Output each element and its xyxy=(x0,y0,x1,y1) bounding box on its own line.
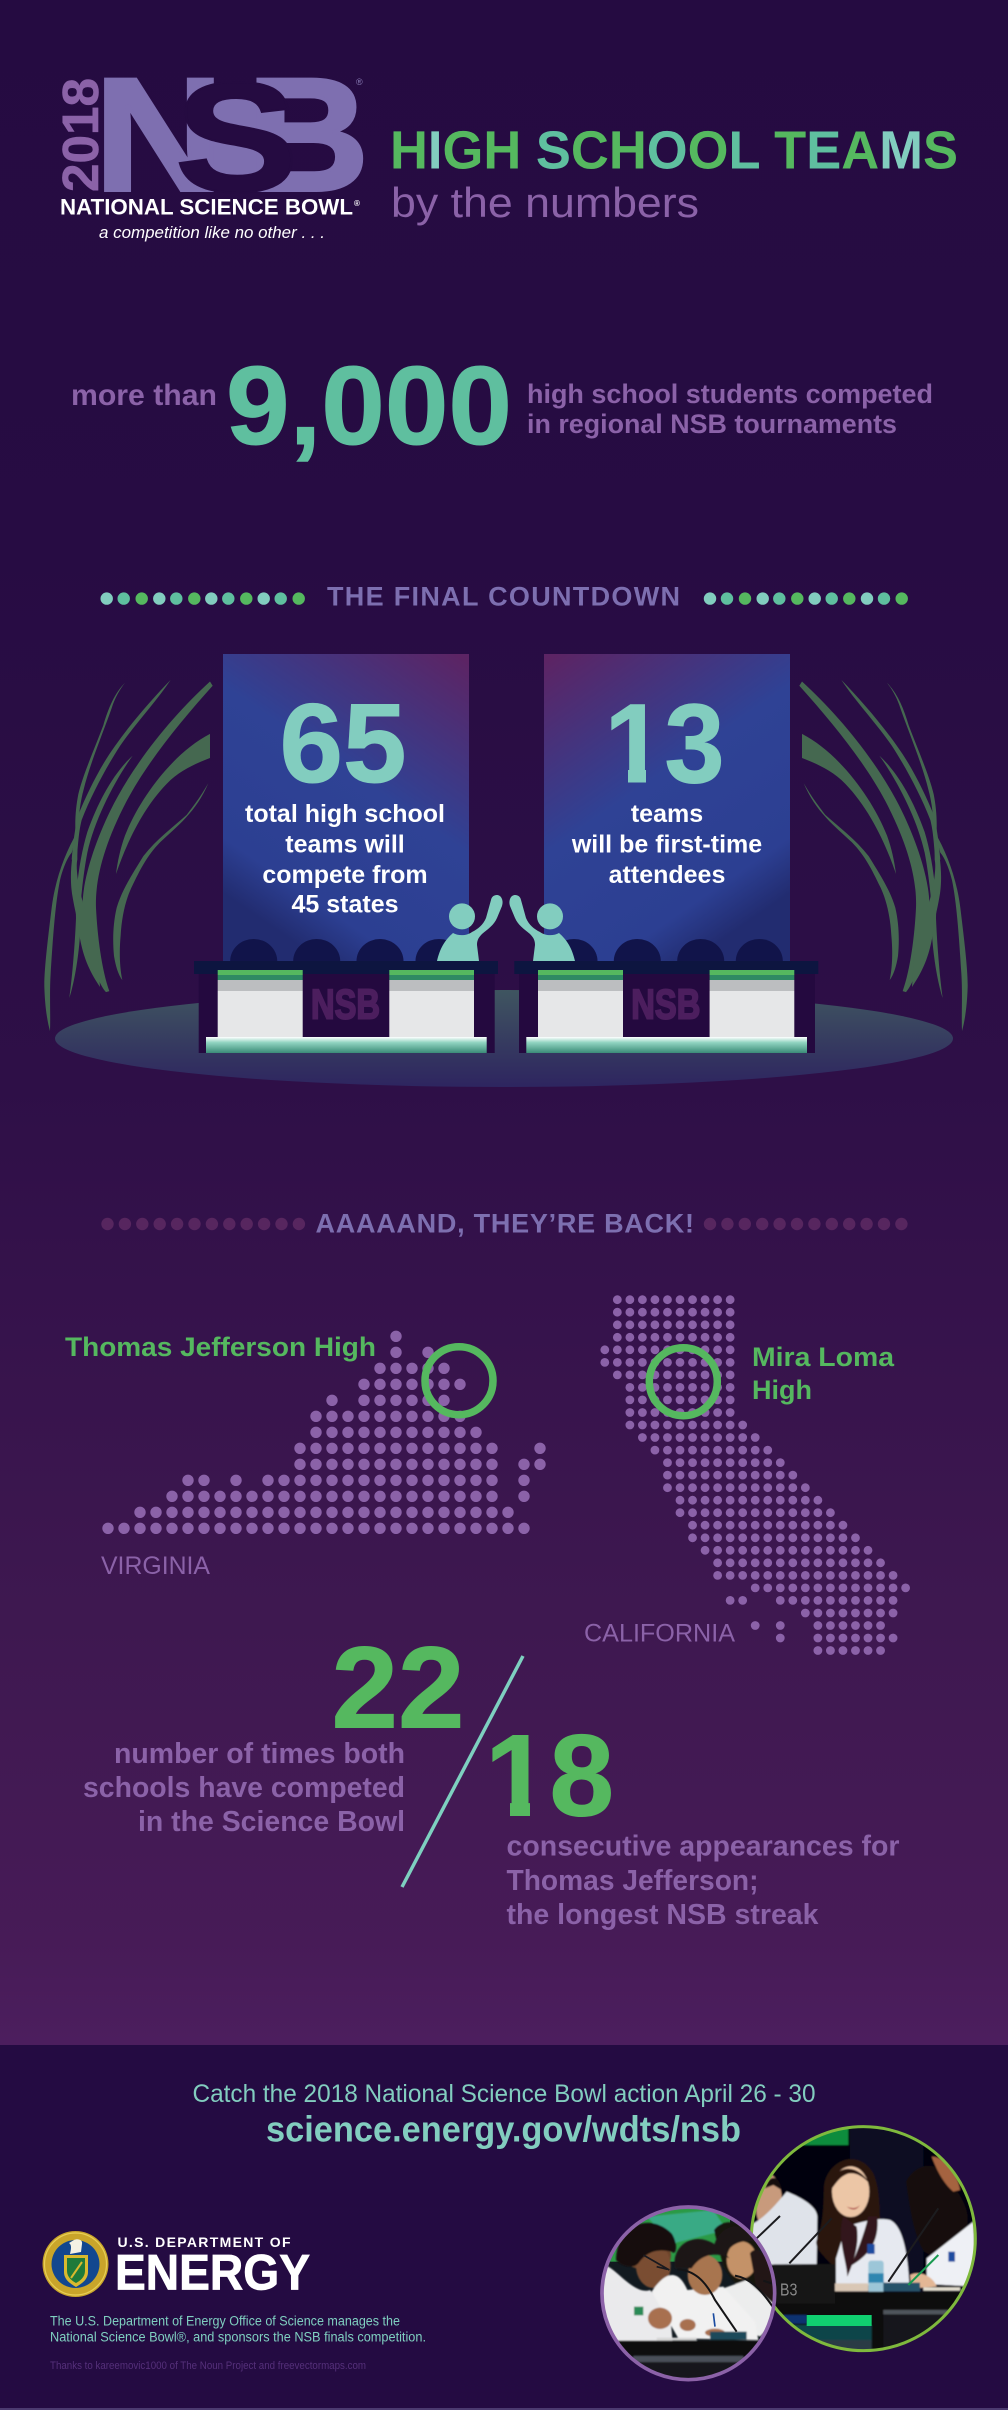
number: 65: 65 xyxy=(280,681,406,806)
text: Energy: ENERGY xyxy=(115,2244,310,2300)
icon: DOE seal xyxy=(42,2231,108,2297)
label: Virginia: VIRGINIA xyxy=(101,1552,210,1580)
panel: footer xyxy=(42,2084,977,2382)
logo mark NSB: S xyxy=(175,51,299,225)
text: DOE statement: National Science Bowl®, and sponsors the NSB finals competition. xyxy=(50,2330,426,2344)
panel: 65 teams screen xyxy=(223,654,469,961)
map: California xyxy=(584,1300,906,1650)
stage floor xyxy=(55,990,953,1087)
icon: contestant left xyxy=(437,895,503,961)
dots right xyxy=(704,592,908,605)
label: Thomas Jefferson High: Thomas Jefferson High xyxy=(65,1332,376,1362)
icon: plants right xyxy=(799,680,968,1031)
text: U.S. Department of: U.S. DEPARTMENT OF xyxy=(118,2234,291,2250)
label: Mira Loma High: High xyxy=(752,1375,812,1405)
photo: girl at the buzzer xyxy=(747,2123,980,2357)
california dot map xyxy=(605,1300,906,1650)
subtitle: by the numbers xyxy=(391,179,699,226)
text: 18 description: Thomas Jefferson; xyxy=(506,1865,758,1897)
icon: seats right xyxy=(550,939,783,961)
dots right xyxy=(704,1218,908,1230)
text: 22 description: number of times both xyxy=(114,1738,405,1770)
stat: 9,000 students xyxy=(71,344,933,468)
text: 18 description: consecutive appearances for xyxy=(506,1830,900,1862)
icon: podium right xyxy=(514,961,818,1053)
text: 22 description: schools have competed xyxy=(83,1772,405,1804)
number: 18: 18 xyxy=(485,1710,614,1840)
logo year: 2018 xyxy=(52,78,109,192)
label: California: CALIFORNIA xyxy=(584,1620,735,1648)
marker ring: Thomas Jefferson xyxy=(425,1347,493,1415)
label: Mira Loma High: Mira Loma xyxy=(752,1342,895,1372)
logo: National Science Bowl xyxy=(52,45,369,242)
logo tagline: a competition like no other . . . xyxy=(99,223,325,242)
number: 9,000: 9,000 xyxy=(226,344,512,468)
logo name: NATIONAL SCIENCE BOWL xyxy=(60,194,353,220)
title: HIGH SCHOOL TEAMS xyxy=(390,120,958,180)
logo mark NSB xyxy=(94,45,369,225)
map: Virginia xyxy=(65,1332,540,1580)
photo: boys at the buzzer xyxy=(600,2205,777,2384)
stat: 22 times competed xyxy=(83,1622,464,1838)
screen background xyxy=(223,654,469,961)
text: credits: Thanks to kareemovic1000 of The Noun Project and freevectormaps.com xyxy=(50,2360,366,2372)
web address: science.energy.gov/wdts/nsb xyxy=(266,2108,741,2150)
text: 22 description: in the Science Bowl xyxy=(138,1806,405,1838)
logo mark NSB: N xyxy=(94,45,224,225)
logo mark NSB: ® xyxy=(356,77,363,87)
number: 13: 13 xyxy=(604,681,724,806)
text: 13 description: attendees xyxy=(609,861,725,889)
dots left xyxy=(101,1218,305,1230)
text: students description: in regional NSB tournaments xyxy=(527,409,897,439)
stat: 18 consecutive appearances xyxy=(492,1734,899,1930)
text: 65 description: teams will xyxy=(285,830,405,858)
icon: podium left: NSB xyxy=(311,980,380,1028)
icon: podium left xyxy=(194,961,498,1053)
photo: girl at the buzzer: B3 xyxy=(780,2279,797,2299)
icon: seats left xyxy=(230,939,462,961)
text: more than: more than xyxy=(71,379,217,412)
icon: podium right: NSB xyxy=(631,980,700,1028)
heading text: AAAAAND, THEY’RE BACK! xyxy=(316,1208,694,1238)
panel: 13 teams screen xyxy=(544,654,790,961)
text: 65 description: compete from xyxy=(262,861,428,889)
logo mark NSB: B xyxy=(247,45,369,225)
text: 13 description: teams xyxy=(631,800,703,828)
text: 13 description: will be first-time xyxy=(571,830,762,858)
bottom edge xyxy=(0,2408,1008,2410)
virginia dot map xyxy=(108,1336,540,1528)
icon: contestant right xyxy=(509,895,575,961)
number: 22: 22 xyxy=(332,1622,464,1752)
dots left xyxy=(100,592,305,605)
divider slash xyxy=(402,1656,523,1887)
text: 65 description: 45 states xyxy=(291,890,399,918)
text: 18 description: the longest NSB streak xyxy=(506,1899,819,1931)
footer background xyxy=(0,2045,1008,2408)
heading: they're back xyxy=(101,1208,908,1238)
text: students description: high school students competed xyxy=(527,379,933,409)
icon: plants left xyxy=(44,680,213,1031)
logo registered mark: ® xyxy=(354,199,360,208)
marker ring: Mira Loma xyxy=(649,1348,717,1416)
screen background xyxy=(544,654,790,961)
text: 65 description: total high school xyxy=(245,800,445,828)
heading text: THE FINAL COUNTDOWN xyxy=(327,582,680,612)
call to action: Catch the 2018 National Science Bowl action April 26 - 30 xyxy=(192,2080,816,2108)
heading: the final countdown xyxy=(100,582,908,612)
text: DOE statement: The U.S. Department of Energy Office of Science manages the xyxy=(50,2314,400,2328)
